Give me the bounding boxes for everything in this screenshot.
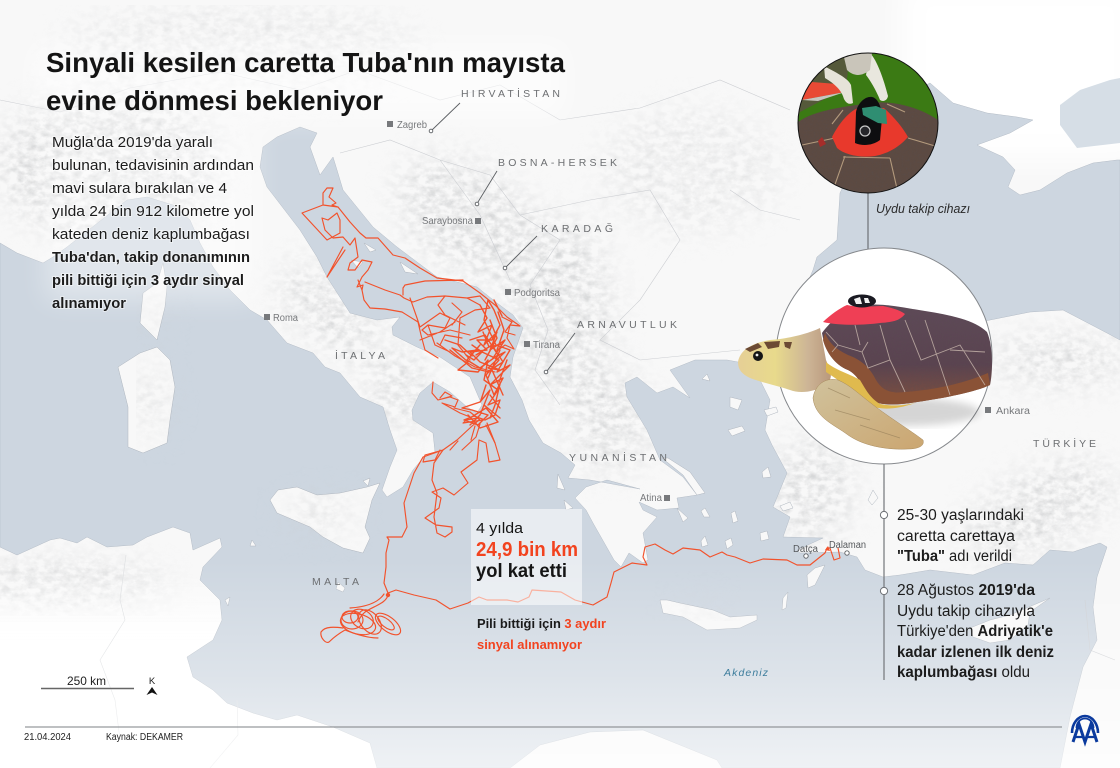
terrain relief (0, 5, 1120, 616)
city labels: Saraybosna (422, 216, 473, 227)
footer line (25, 726, 1062, 728)
callout: battery note (477, 617, 606, 652)
info text: first tracked: Türkiye'den Adriyatik'e (897, 623, 1053, 640)
info text: first tracked: 28 Ağustos 2019'da (897, 582, 1035, 599)
migration route (302, 188, 840, 642)
turtle pink paint patch (823, 305, 905, 325)
info text: name: 25-30 yaşlarındaki (897, 507, 1024, 524)
city labels: Zagreb (397, 120, 427, 131)
turtle scute lines (826, 320, 985, 395)
footer: date: 21.04.2024 (24, 732, 71, 743)
route: adriatic crossings (338, 207, 520, 372)
photo: satellite tracker on shell (798, 53, 938, 193)
intro text: yılda 24 bin 912 kilometre yol (52, 204, 254, 220)
islands (118, 243, 1050, 643)
city labels (264, 120, 1030, 558)
turtle neck and head (738, 328, 831, 392)
route: south of malta loops (321, 594, 404, 642)
land fade south (0, 570, 390, 768)
title: Sinyali kesilen caretta Tuba'nın mayısta (46, 47, 565, 78)
connector: device to turtle (867, 193, 869, 298)
city labels: Roma (273, 313, 298, 324)
info text: first tracked: kaplumbağası oldu (897, 664, 1030, 681)
info text: first tracked: Uydu takip cihazıyla (897, 603, 1035, 620)
route: salento loops (432, 382, 495, 450)
white glow behind title and body text (34, 46, 564, 300)
route end marker (825, 546, 830, 551)
callout: distance box: yol kat etti (476, 560, 567, 582)
land whitening north east (900, 0, 1120, 160)
tracker highlights (854, 297, 870, 304)
intro text: kateden deniz kaplumbağası (52, 227, 250, 243)
north arrow (146, 676, 158, 695)
flipper markings (828, 388, 900, 438)
intro text: alınamıyor (52, 296, 126, 312)
callout: distance box: 24,9 bin km (476, 539, 578, 561)
turtle circle (776, 248, 992, 464)
info text: first tracked: kadar izlenen ilk deniz (897, 644, 1054, 661)
footer: source: Kaynak: DEKAMER (106, 732, 183, 743)
title: evine dönmesi bekleniyor (46, 85, 383, 116)
route: east mediterranean track (384, 420, 840, 609)
intro text: Muğla'da 2019'da yaralı (52, 135, 213, 151)
city labels: Datça (793, 544, 818, 555)
label: satellite device caption: Uydu takip cihazı (876, 202, 970, 216)
intro text (52, 135, 254, 312)
info text: first tracked (897, 582, 1054, 681)
scale bar (41, 674, 134, 688)
title (46, 47, 565, 116)
info text: name: caretta carettaya (897, 528, 1015, 545)
intro text: pili bittiği için 3 aydır sinyal (52, 273, 244, 289)
info timeline nodes (880, 511, 888, 595)
route: central tangle (445, 300, 510, 428)
country labels: KARADAĞ (541, 222, 613, 235)
callout: battery note: Pili bittiği için 3 aydır (477, 617, 606, 631)
turtle illustration (738, 294, 992, 449)
intro text: bulunan, tedavisinin ardından (52, 158, 254, 174)
country labels: YUNANİSTAN (569, 451, 667, 464)
intro text: Tuba'dan, takip donanımının (52, 250, 250, 266)
city labels: Tirana (533, 340, 560, 351)
callout: distance box (471, 509, 582, 605)
line: info timeline (883, 464, 885, 680)
label: Akdeniz: Akdeniz (723, 667, 769, 679)
callout: battery note: sinyal alınamıyor (477, 638, 582, 652)
turtle front flipper (813, 379, 923, 449)
city labels: Dalaman (829, 540, 866, 551)
country labels: MALTA (312, 576, 359, 588)
intro text: mavi sulara bırakılan ve 4 (52, 181, 227, 197)
country leader lines (429, 103, 575, 374)
turtle yellow underside (826, 362, 915, 409)
turtle shell rim (823, 333, 990, 404)
country labels: HIRVATİSTAN (461, 87, 560, 100)
country labels (312, 87, 1096, 588)
bottom fade (0, 560, 1120, 768)
city labels: Atina (640, 493, 662, 504)
info text: name: "Tuba" adı verildi (897, 548, 1012, 565)
country labels: ARNAVUTLUK (577, 319, 677, 331)
country labels: TÜRKİYE (1033, 437, 1096, 450)
black sea (800, 83, 1120, 340)
turtle shell (822, 305, 992, 404)
scale bar: 250 km (67, 674, 106, 688)
country labels: İTALYA (335, 349, 385, 362)
route: north adriatic (302, 188, 372, 290)
north arrow: K (149, 676, 156, 687)
turtle tracker device (848, 294, 876, 308)
logo: Anadolu Agency (1072, 716, 1098, 742)
country labels: BOSNA-HERSEK (498, 157, 617, 169)
route: ionian loop (423, 425, 500, 537)
city labels: Podgoritsa (514, 288, 560, 299)
info text: name (897, 507, 1024, 565)
city labels: Ankara (996, 406, 1030, 417)
callout: distance box: 4 yılda (476, 521, 524, 537)
sea of azov (1060, 78, 1120, 148)
route start marker (386, 593, 390, 597)
turtle shadow (830, 398, 980, 426)
island relief (136, 284, 741, 621)
turtle head markings (745, 341, 792, 361)
